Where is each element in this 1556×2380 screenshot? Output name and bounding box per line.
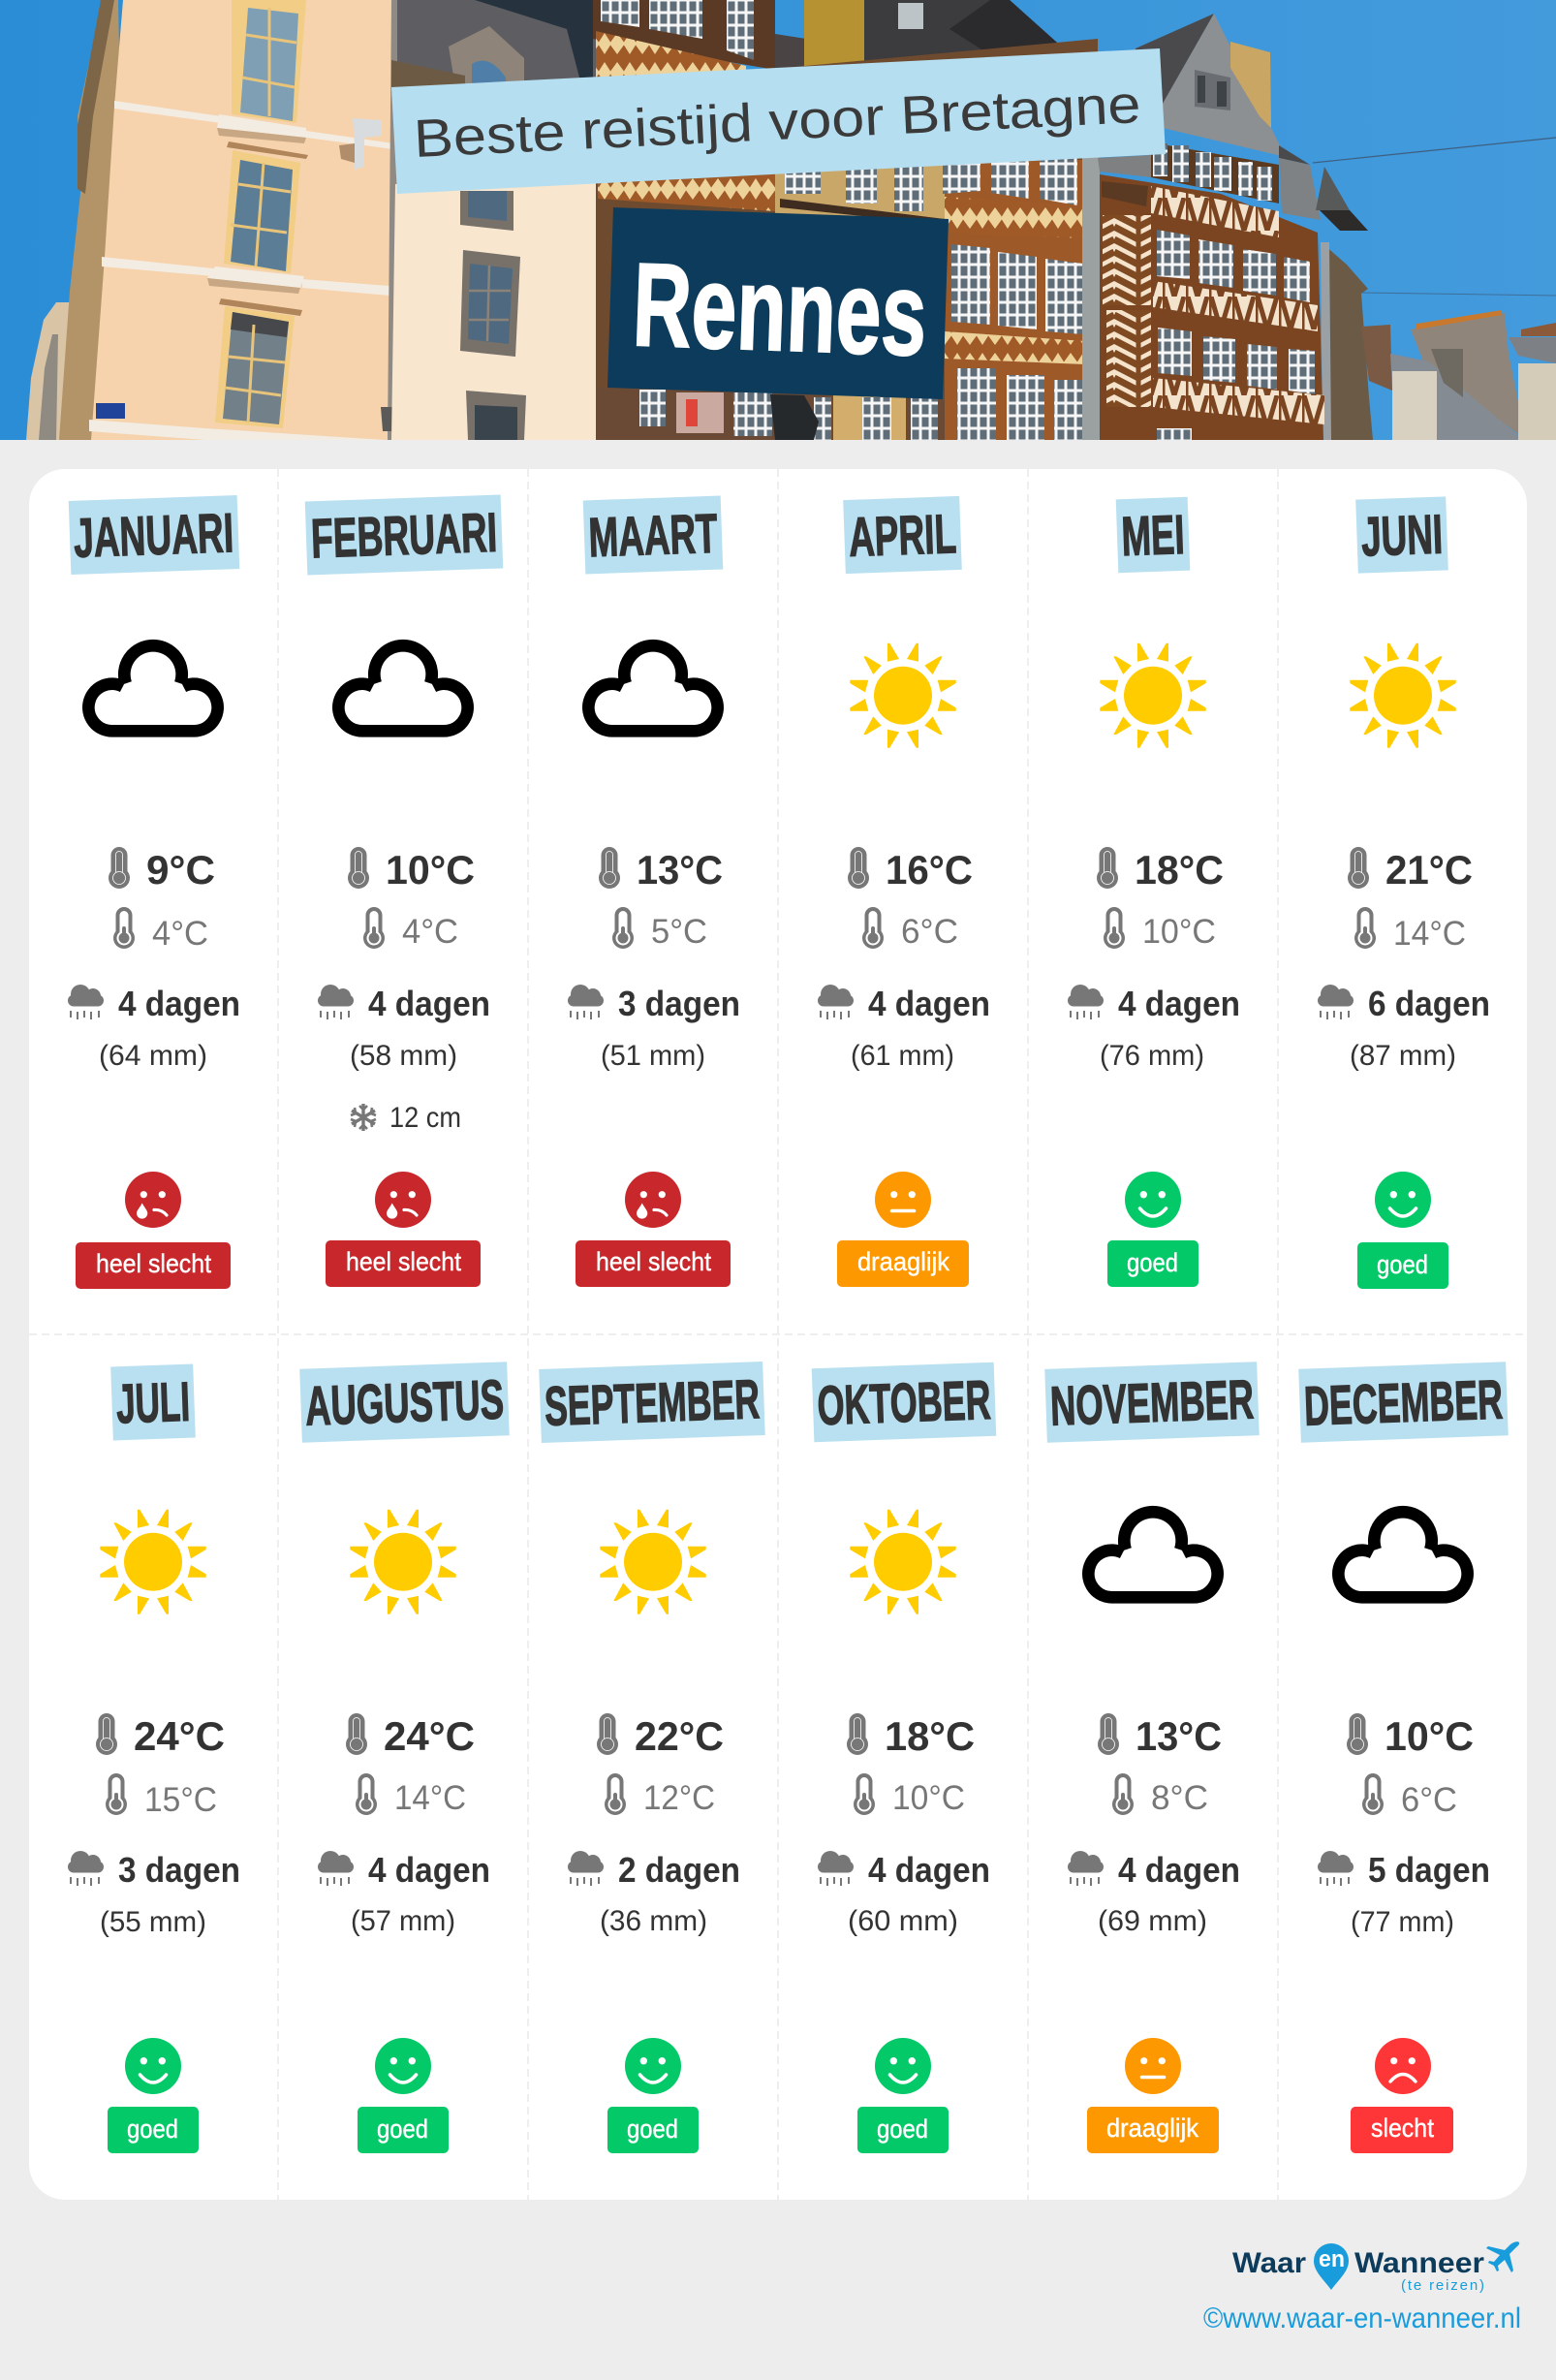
max temperature: 13°C: [1136, 1713, 1222, 1759]
min temperature: [1354, 907, 1466, 953]
month: februari: [305, 494, 503, 1287]
max temperature: 9°C: [146, 847, 215, 892]
month label: [812, 1362, 996, 1442]
month: september: [539, 1362, 765, 2153]
min temperature: 15°C: [144, 1781, 217, 1819]
min temperature: 6°C: [1401, 1781, 1457, 1819]
min temperature: 14°C: [1393, 915, 1466, 953]
min temperature: 4°C: [402, 913, 458, 951]
rain days: 4 dagen: [1118, 1850, 1240, 1890]
min temperature: [363, 907, 458, 951]
rain days: 4 dagen: [1118, 984, 1240, 1023]
rainfall: (57 mm): [351, 1905, 455, 1937]
rating badge: [576, 1240, 731, 1287]
rainfall: (36 mm): [600, 1905, 707, 1937]
month label: MAART: [587, 503, 719, 569]
rating badge: goed: [1127, 1248, 1178, 1277]
min temperature: 6°C: [901, 913, 958, 951]
rating smiley: [875, 2038, 931, 2094]
icon: cloud: [88, 645, 218, 731]
rainfall: (87 mm): [1350, 1040, 1456, 1072]
min temperature: [356, 1773, 466, 1817]
rating smiley: [125, 2038, 181, 2094]
rating badge: [1107, 1240, 1198, 1287]
month label: JULI: [115, 1371, 191, 1435]
title banner: Beste reistijd voor Bretagne: [391, 48, 1166, 194]
rainfall: (77 mm): [1351, 1906, 1454, 1938]
header photo: half-timbered houses in Rennes: [0, 0, 1556, 440]
rain days: [568, 984, 740, 1023]
month: november: [1044, 1362, 1260, 2153]
city title: Rennes: Rennes: [631, 238, 929, 381]
icon: map pin: en: [1319, 2246, 1345, 2272]
min temperature: [862, 907, 958, 951]
rating smiley: [875, 1172, 931, 1228]
min temperature: [106, 1773, 217, 1819]
max temperature: [1348, 847, 1473, 892]
rating smiley: [1375, 1172, 1431, 1228]
rating badge: [1087, 2107, 1219, 2153]
month label: [539, 1362, 765, 1443]
rain days: [1068, 984, 1240, 1023]
icon: sun: [1100, 643, 1206, 748]
rainfall: (60 mm): [848, 1905, 958, 1937]
rainfall: (61 mm): [851, 1040, 954, 1072]
min temperature: 10°C: [1142, 913, 1216, 951]
month: mei: [1068, 497, 1240, 1287]
rating badge: goed: [377, 2114, 428, 2144]
icon: sun: [600, 1510, 706, 1614]
month label: APRIL: [848, 503, 957, 569]
rating badge: draaglijk: [1106, 2114, 1198, 2143]
month label: [69, 495, 239, 575]
rating smiley: [1375, 2038, 1431, 2094]
panel: monthly climate table: [29, 469, 1527, 2200]
rating badge: [358, 2107, 449, 2153]
city title: Rennes: [607, 207, 949, 399]
rain days: 6 dagen: [1368, 984, 1490, 1023]
rainfall: (69 mm): [1098, 1905, 1207, 1937]
rain days: [1318, 984, 1490, 1023]
rain days: 4 dagen: [118, 984, 240, 1023]
rainfall: (55 mm): [100, 1906, 206, 1938]
min temperature: 4°C: [152, 915, 208, 953]
month label: [1044, 1362, 1260, 1443]
rating smiley: [625, 1172, 681, 1228]
snowfall: [351, 1102, 461, 1134]
max temperature: 16°C: [886, 847, 973, 892]
max temperature: 24°C: [134, 1713, 225, 1759]
rain days: [568, 1850, 740, 1890]
rating badge: [1351, 2107, 1453, 2153]
rainfall: (58 mm): [350, 1040, 457, 1072]
icon: cloud: [1338, 1512, 1468, 1597]
month label: AUGUSTUS: [304, 1368, 505, 1438]
rating badge: goed: [127, 2114, 178, 2144]
min temperature: 10°C: [892, 1779, 965, 1817]
rain days: [1068, 1850, 1240, 1890]
min temperature: [113, 907, 208, 953]
max temperature: [848, 847, 973, 892]
min temperature: [612, 907, 707, 951]
rain days: 4 dagen: [868, 984, 990, 1023]
rain days: [818, 1850, 990, 1890]
max temperature: [1347, 1713, 1474, 1759]
rating smiley: [625, 2038, 681, 2094]
rain days: 2 dagen: [618, 1850, 740, 1890]
min temperature: 14°C: [394, 1779, 466, 1817]
icon: map pin: [1314, 2243, 1349, 2290]
rating badge: goed: [1377, 1250, 1428, 1279]
month: oktober: [812, 1362, 996, 2153]
rating badge: draaglijk: [857, 1247, 949, 1276]
month label: JUNI: [1360, 504, 1444, 568]
rain days: 4 dagen: [368, 1850, 490, 1890]
logo: Waar en Wanneer: (te reizen): [1401, 2277, 1484, 2294]
rainfall: (51 mm): [601, 1040, 705, 1072]
min temperature: [1362, 1773, 1457, 1819]
month label: MEI: [1120, 504, 1186, 568]
rating smiley: [375, 1172, 431, 1228]
rain days: 3 dagen: [618, 984, 740, 1023]
max temperature: 22°C: [635, 1713, 724, 1759]
month label: JANUARI: [73, 502, 234, 570]
rating badge: [326, 1240, 481, 1287]
rain days: 4 dagen: [368, 984, 490, 1023]
min temperature: [854, 1773, 965, 1817]
max temperature: 18°C: [1135, 847, 1224, 892]
max temperature: [348, 847, 475, 892]
rain days: [68, 984, 240, 1023]
month: juli: [68, 1364, 240, 2153]
max temperature: [599, 847, 723, 892]
rain days: [1318, 1850, 1490, 1890]
rain days: 5 dagen: [1368, 1850, 1490, 1890]
max temperature: 24°C: [384, 1713, 475, 1759]
max temperature: 21°C: [1385, 847, 1473, 892]
icon: cloud: [588, 645, 718, 731]
month: januari: [68, 495, 240, 1289]
logo: Waar en Wanneer: Wanneer: [1354, 2247, 1484, 2279]
rain days: 3 dagen: [118, 1850, 240, 1890]
month label: [583, 496, 723, 574]
icon: sun: [1350, 643, 1456, 748]
icon: sun: [350, 1510, 456, 1614]
max temperature: [1098, 1713, 1222, 1759]
max temperature: 13°C: [637, 847, 723, 892]
rain days: [318, 1850, 490, 1890]
icon: cloud: [338, 645, 468, 731]
snowfall: 12 cm: [389, 1102, 461, 1134]
rating badge: heel slecht: [346, 1247, 461, 1276]
rainfall: (76 mm): [1100, 1040, 1204, 1072]
max temperature: 18°C: [885, 1713, 975, 1759]
min temperature: 5°C: [651, 913, 707, 951]
month label: [299, 1362, 510, 1443]
max temperature: 10°C: [1385, 1713, 1474, 1759]
rating smiley: [1125, 2038, 1181, 2094]
month label: [110, 1364, 196, 1440]
min temperature: [1112, 1773, 1208, 1817]
rating badge: goed: [877, 2114, 928, 2144]
month label: FEBRUARI: [310, 502, 498, 570]
icon: sun: [850, 643, 956, 748]
min temperature: [605, 1773, 715, 1817]
icon: airplane: [1486, 2241, 1519, 2272]
max temperature: [109, 847, 215, 892]
rating badge: slecht: [1371, 2114, 1434, 2143]
rating smiley: [375, 2038, 431, 2094]
month label: [843, 496, 962, 574]
icon: cloud: [1088, 1512, 1218, 1597]
icon: sun: [100, 1510, 206, 1614]
month label: [1355, 496, 1448, 574]
icon: sun: [850, 1510, 956, 1614]
max temperature: 10°C: [386, 847, 475, 892]
month label: OKTOBER: [816, 1369, 992, 1437]
rating smiley: [125, 1172, 181, 1228]
rating badge: [857, 2107, 949, 2153]
rating badge: [837, 1240, 969, 1287]
min temperature: 8°C: [1151, 1779, 1208, 1817]
month label: [1116, 497, 1190, 573]
rain days: [68, 1850, 240, 1890]
rating badge: [76, 1242, 231, 1289]
month label: NOVEMBER: [1049, 1368, 1255, 1438]
month: april: [818, 496, 990, 1287]
rating badge: goed: [627, 2114, 678, 2144]
rating badge: [607, 2107, 699, 2153]
rating badge: heel slecht: [596, 1247, 711, 1276]
logo: Waar en Wanneer: Waar: [1232, 2247, 1306, 2279]
website url: ©www.waar-en-wanneer.nl: [1203, 2302, 1521, 2334]
rain days: [318, 984, 490, 1023]
max temperature: [1097, 847, 1224, 892]
month: maart: [568, 496, 740, 1287]
logo: Waar en Wanneer: [1232, 2241, 1519, 2294]
max temperature: [597, 1713, 724, 1759]
rating badge: heel slecht: [96, 1249, 211, 1278]
rain days: 4 dagen: [868, 1850, 990, 1890]
rainfall: (64 mm): [99, 1040, 207, 1072]
rating smiley: [1125, 1172, 1181, 1228]
month: juni: [1318, 496, 1490, 1289]
month: december: [1298, 1362, 1509, 2153]
title banner: Beste reistijd voor Bretagne: Beste reistijd voor Bretagne: [413, 74, 1142, 169]
month: augustus: [299, 1362, 510, 2153]
rating badge: [1357, 1242, 1448, 1289]
min temperature: 12°C: [643, 1779, 715, 1817]
rating badge: [108, 2107, 199, 2153]
month label: [305, 494, 503, 576]
month label: SEPTEMBER: [544, 1368, 761, 1438]
rain days: [818, 984, 990, 1023]
min temperature: [1104, 907, 1216, 951]
